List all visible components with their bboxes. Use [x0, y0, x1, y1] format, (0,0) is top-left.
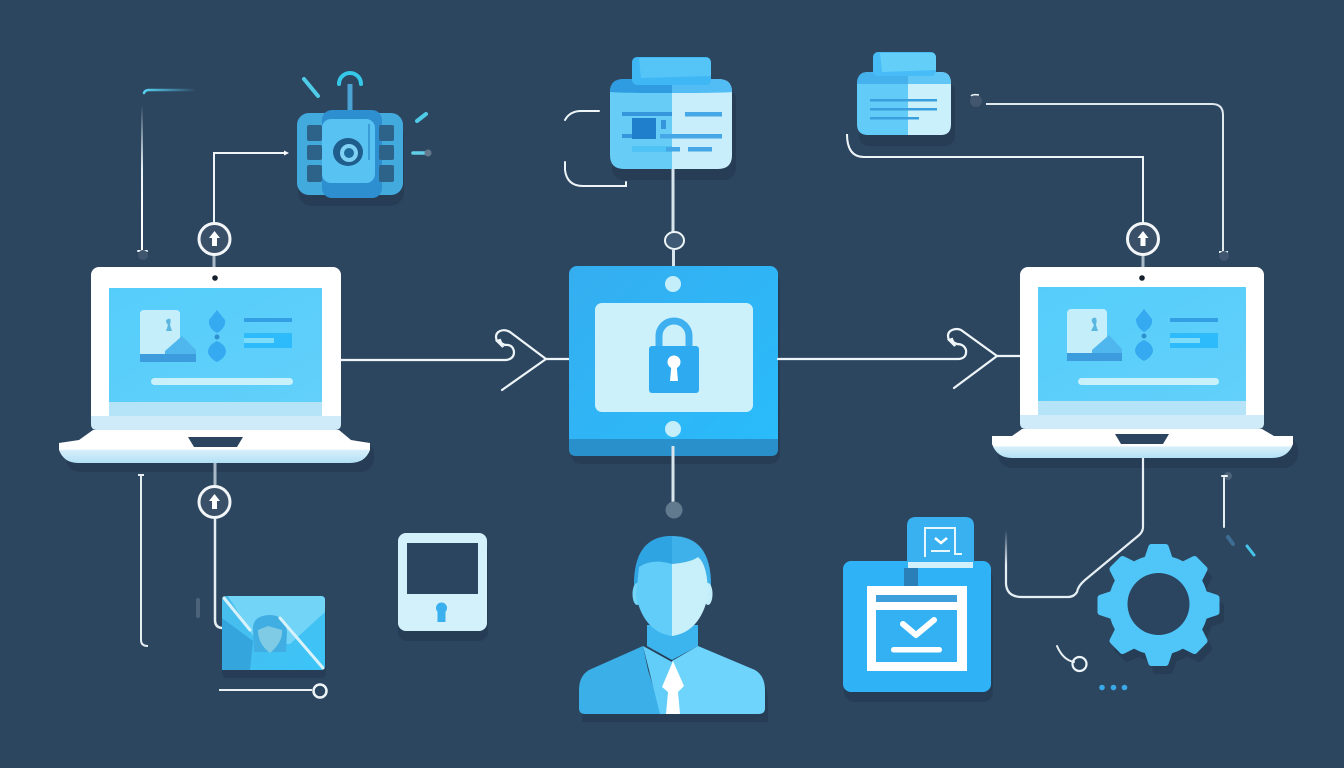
connector: document brackets [565, 111, 626, 186]
card: top centre document [610, 57, 736, 180]
screen content: picture card [1067, 309, 1122, 361]
connector: lock to person [666, 446, 682, 518]
icon: small checklist tab [907, 517, 974, 568]
laptop: left [59, 267, 374, 472]
connector: left faded bracket line [138, 90, 196, 260]
connector: top right document to right laptop [847, 95, 1229, 267]
connector: left laptop to router with arrow badge [199, 150, 289, 267]
connector: small lower right marks [1222, 472, 1254, 555]
icon: envelope with avatar [222, 596, 326, 678]
connector: lower left lines with arrow badge [138, 463, 326, 698]
icon: person [579, 536, 768, 722]
icon: lock tablet [398, 533, 488, 641]
icon: checklist panel [843, 517, 993, 702]
connector: left laptop to central lock [341, 330, 570, 390]
laptop: right [992, 267, 1298, 468]
screen content: picture card [140, 310, 196, 362]
screen content: progress bar [151, 378, 293, 385]
connector: right laptop to gear [1006, 458, 1143, 671]
screen content: text bars [1170, 318, 1218, 348]
panel: central lock [569, 266, 780, 464]
card: top right document [857, 52, 955, 146]
screen content: diamonds [208, 310, 226, 362]
connector: central lock to right laptop [778, 329, 1020, 388]
icon: router device [297, 73, 432, 206]
connector: document to lock [665, 169, 684, 266]
icon: gear [1098, 544, 1224, 674]
screen content: text bars [244, 318, 292, 348]
icon: padlock [649, 321, 699, 393]
screen content: progress bar [1078, 378, 1219, 385]
screen content: diamonds [1135, 309, 1153, 361]
dots: three small blue dots [1099, 685, 1127, 690]
